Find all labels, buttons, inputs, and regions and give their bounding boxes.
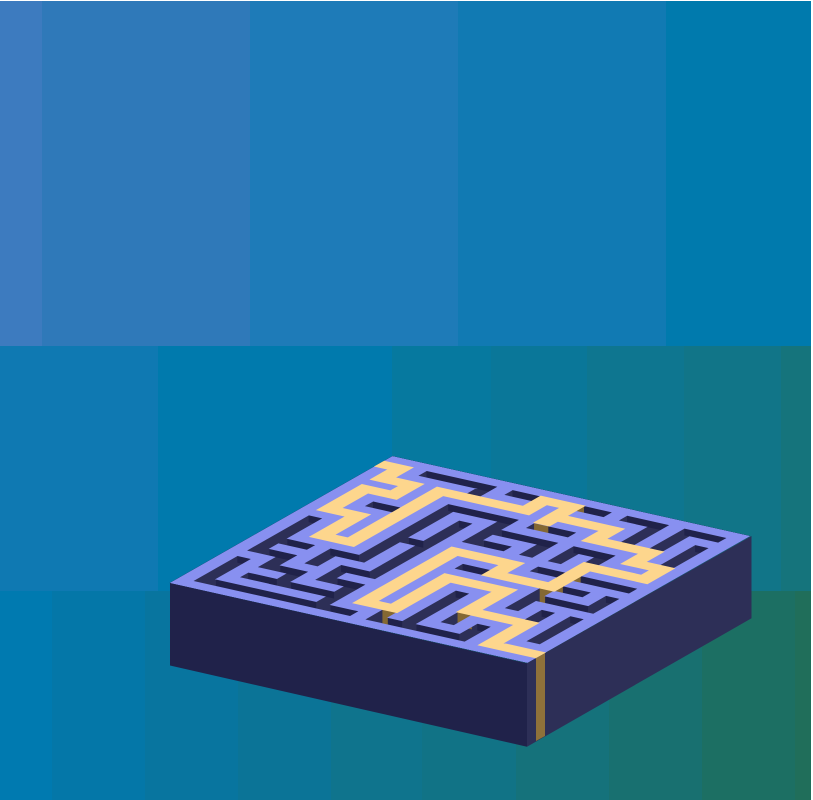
- solution path: [183, 464, 737, 655]
- maze top surface: [170, 456, 750, 663]
- maze block: [170, 456, 752, 747]
- exit path gold strip: [536, 653, 545, 741]
- left side face: [170, 583, 527, 747]
- light walls: [170, 456, 750, 663]
- background: bottom band: [0, 591, 811, 800]
- background: middle band: [0, 346, 811, 591]
- background: top band: [0, 1, 811, 346]
- right side face: [527, 536, 752, 747]
